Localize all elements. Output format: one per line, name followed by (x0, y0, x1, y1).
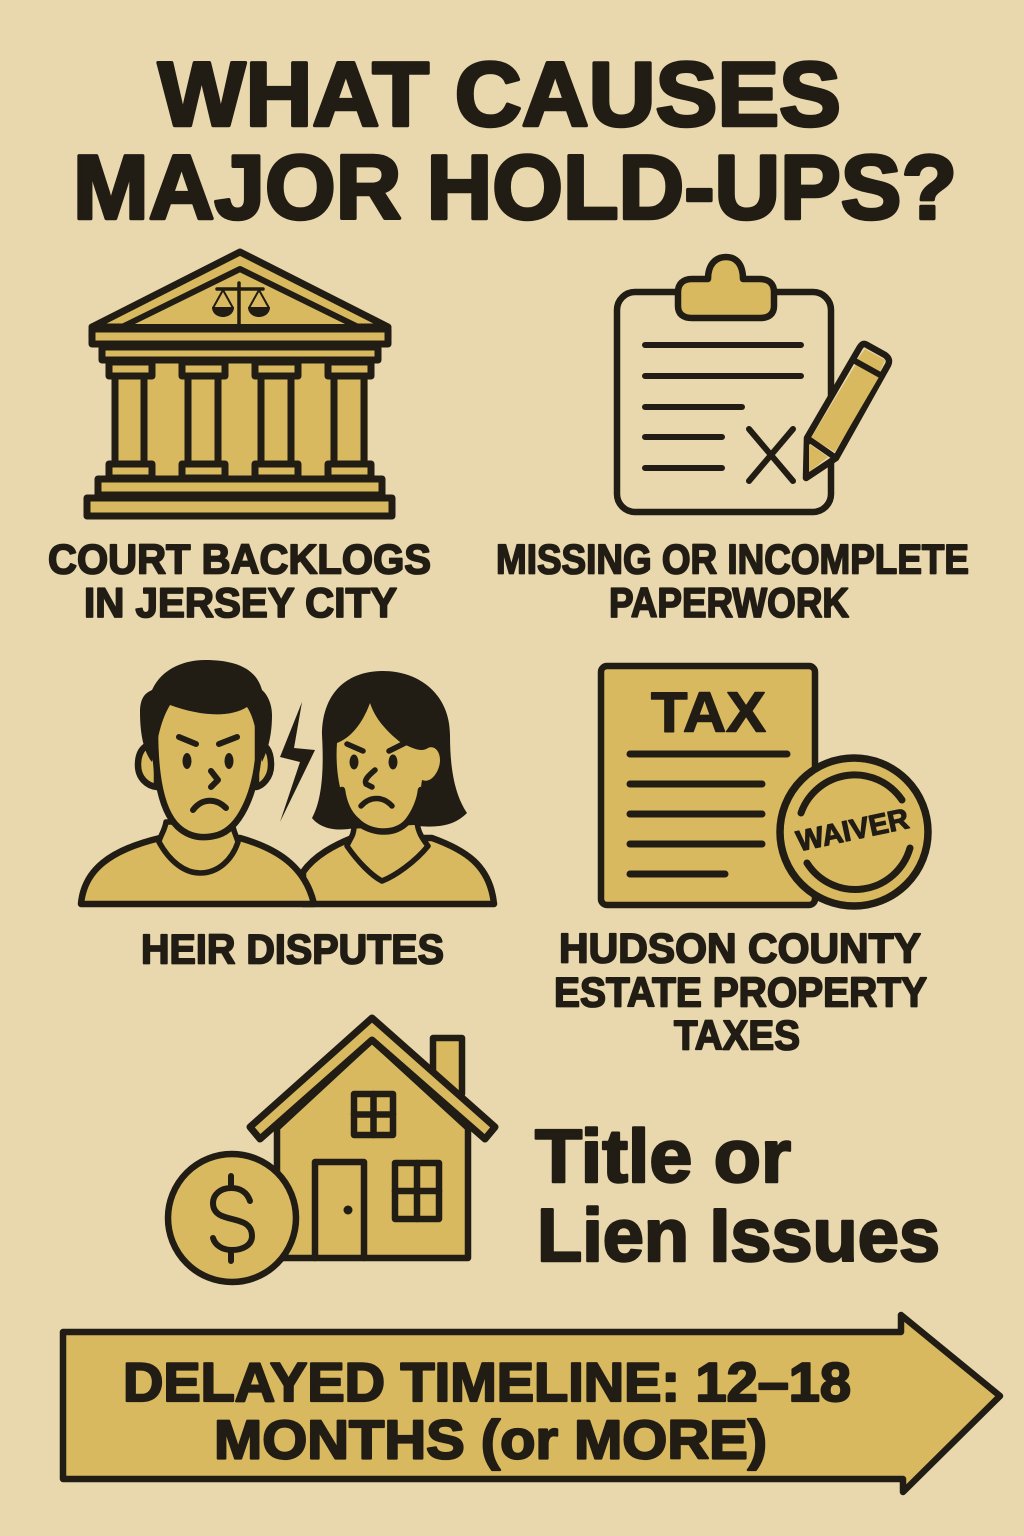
label: hudson county estate property taxes: HUDSON COUNTY (559, 924, 921, 972)
icon: clipboard and pencil (617, 257, 889, 512)
icon: dollar coin (168, 1154, 296, 1282)
label: title or lien issues: Lien Issues (537, 1193, 940, 1277)
man (81, 660, 314, 904)
arrow: delayed timeline (63, 1315, 1000, 1492)
text: TAX: TAX (651, 680, 766, 744)
label: court backlogs: COURT BACKLOGS (48, 536, 431, 582)
icon: scales of justice (212, 283, 270, 325)
label: hudson county estate property taxes: ESTATE PROPERTY (554, 968, 927, 1016)
label: hudson county estate property taxes: TAXES (674, 1012, 800, 1058)
label: missing or incomplete paperwork: PAPERWORK (609, 579, 849, 626)
text: WAIVER: WAIVER (794, 803, 912, 858)
label: title or lien issues: Title or (535, 1114, 791, 1198)
icon: tax document with waiver stamp (601, 666, 928, 906)
label: missing or incomplete paperwork: MISSING OR INCOMPLETE (496, 536, 969, 582)
label: court backlogs (48, 536, 431, 626)
label: hudson county estate property taxes (554, 924, 927, 1058)
text: delayed timeline: DELAYED TIMELINE: 12–18 (123, 1351, 851, 1413)
woman (303, 671, 494, 904)
label: heir disputes: HEIR DISPUTES (141, 926, 444, 972)
text: delayed timeline (123, 1351, 851, 1470)
title: WHAT CAUSES (158, 44, 841, 146)
icon: pencil (806, 344, 889, 478)
icon: house with dollar coin (168, 1018, 495, 1282)
label: missing or incomplete paperwork (496, 536, 969, 626)
label: title or lien issues (535, 1114, 940, 1277)
icon: lightning bolt (280, 702, 315, 822)
text: delayed timeline: MONTHS (or MORE) (214, 1408, 767, 1470)
title: MAJOR HOLD-UPS? (73, 138, 957, 238)
title (73, 44, 957, 238)
icon: arguing heirs (81, 660, 494, 904)
label: court backlogs: IN JERSEY CITY (84, 579, 397, 626)
icon: courthouse (87, 252, 392, 516)
